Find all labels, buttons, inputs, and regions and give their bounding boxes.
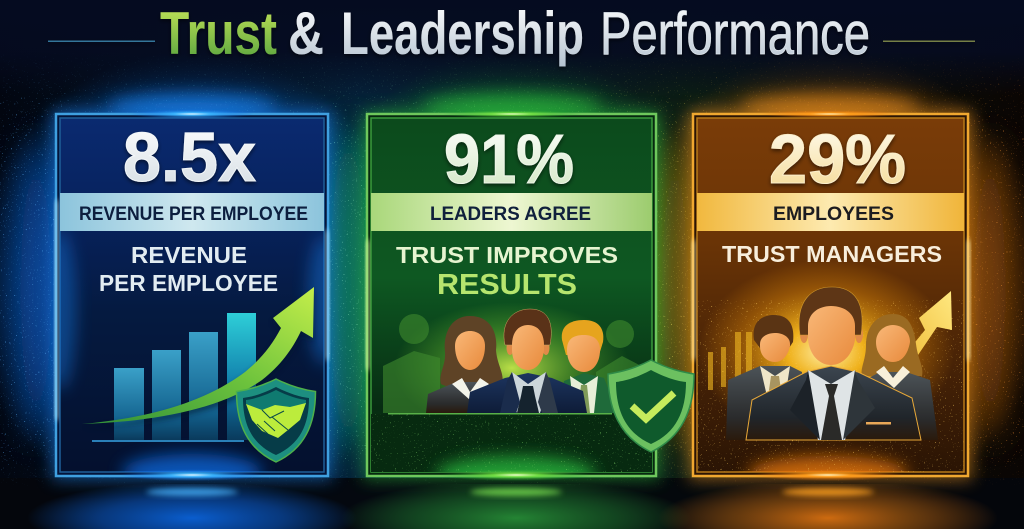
right edge glow [967,240,970,360]
growth arrow [916,291,952,355]
subheading: REVENUE [131,242,247,268]
label band: EMPLOYEES [773,203,894,225]
label band [371,193,652,231]
bar chart [92,313,256,442]
top hot spot [442,110,582,118]
manager team group [697,264,964,472]
title word Trust: Trust [160,0,277,67]
title word Leadership: Leadership [341,0,584,67]
leadership team group [371,307,652,472]
pocket square [866,422,891,424]
arrow: growth [82,287,314,428]
top hot spot [130,109,254,119]
panel: revenue per employee [44,94,340,490]
bottom hot spot [120,469,264,481]
woman [426,316,503,413]
central man [746,287,921,440]
right edge glow [326,230,329,360]
title ampersand: & [288,0,324,67]
top hot spot [760,110,900,118]
label band: LEADERS AGREE [430,203,591,225]
background silhouettes [383,314,645,413]
label band [60,193,324,231]
label band: REVENUE PER EMPLOYEE [79,203,308,225]
big number 8.5x: 8.5x [123,118,256,196]
right man [562,320,614,413]
team baseline [388,413,612,414]
floor reflections [27,484,998,529]
icon: handshake shield [236,379,316,462]
bottom hot spot [440,469,592,481]
panel: employees trust managers [689,94,972,492]
title [48,0,975,67]
faint bar chart [708,332,752,390]
subheading [396,242,618,301]
left man [726,315,802,440]
woman [862,314,938,440]
panel: leaders agree [363,94,660,492]
subheading: RESULTS [437,269,577,301]
left edge glow [55,200,58,420]
icon: check shield [608,360,694,452]
left edge glow [692,240,695,360]
subheading: TRUST MANAGERS [722,241,942,267]
inner side glows [44,230,340,490]
label band [697,193,964,231]
big number 29%: 29% [769,120,906,198]
bottom hot spot [752,469,904,481]
subheading: PER EMPLOYEE [99,270,278,296]
subheading: TRUST IMPROVES [396,242,618,268]
central man [467,309,587,413]
title accent line right [883,40,975,42]
title word Performance: Performance [600,0,870,67]
big number 91%: 91% [444,120,574,198]
subheading [99,242,278,296]
title accent line left [48,40,155,42]
left edge glow [366,240,369,370]
